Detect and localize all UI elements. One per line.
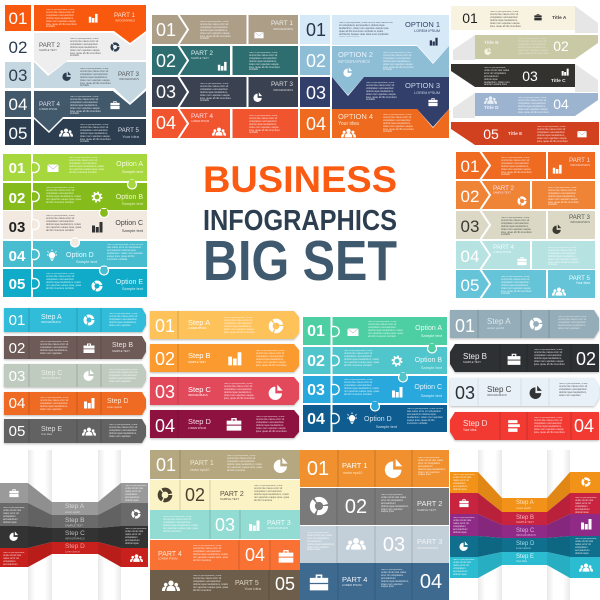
ribbon band: step C: Step C (65, 530, 85, 537)
ribbon band: step C (450, 514, 600, 538)
row: option E: 05 (9, 276, 25, 293)
row: step B: SAMPLE TEXT (188, 360, 206, 364)
row: title A (451, 6, 598, 33)
row: part 3: PART 3 (267, 520, 291, 527)
row: part 1: 01 (156, 455, 176, 475)
row: part 2: PART 2 (39, 42, 61, 49)
ribbon band: step C (0, 526, 148, 548)
row: option 1: OPTION 1 (405, 20, 440, 29)
row: step E: 05 (9, 423, 25, 440)
row: option B: Sample text (421, 365, 443, 370)
row: step B: Step B (112, 342, 133, 349)
row: part 3 (150, 510, 300, 539)
row: part 5 (150, 570, 300, 600)
row: step C (450, 378, 599, 406)
row: step D: 04 (155, 416, 175, 436)
ribbon band: step A (0, 483, 148, 515)
row: part 4: LOREM IPSUM (493, 250, 511, 254)
ribbon band: step A: vector eps10 (516, 506, 531, 510)
row: part 1: PART 1 (190, 460, 214, 467)
row: option 2: 02 (306, 51, 326, 71)
row: step A: Step A (487, 317, 511, 326)
row: part 2: SAMPLE TEXT (191, 56, 209, 60)
row: step C: 03 (9, 368, 25, 385)
ribbon band: step E: Your idea (516, 559, 527, 563)
panel: five parts tile grid, tan cream teal orange brown (150, 450, 300, 600)
row: part 3 (300, 526, 449, 563)
row: step C: INFOGRAPHICS (188, 393, 208, 397)
row: option D: Sample text (76, 259, 98, 264)
title: BIG SET (203, 229, 397, 293)
row: option D: 04 (307, 411, 325, 428)
row: step C: INFOGRAPHICS (487, 393, 507, 397)
ribbon band: step A: Step A (516, 500, 534, 506)
row: part 2 (152, 45, 298, 76)
row: part 4: PART 4 (39, 101, 61, 108)
row: option C: Option C (115, 220, 143, 227)
row: title D (453, 93, 598, 118)
row: part 3: 03 (9, 66, 27, 85)
row: part 4: LOREM IPSUM (342, 583, 362, 587)
row: option 1: LOREM IPSUM (414, 29, 440, 33)
panel: steps with alternating arrows, slate black pale red (450, 310, 599, 440)
row: part 4: 04 (245, 545, 265, 565)
row: part 2: SAMPLE TEXT (39, 48, 57, 52)
row: part 5: 05 (9, 124, 27, 143)
row: part 2 (150, 480, 300, 510)
row: title C: 03 (522, 68, 538, 84)
row: part 3: INFOGRAPHICS (570, 220, 590, 224)
row: part 2 (300, 488, 449, 525)
row: part 4 (300, 563, 449, 600)
row: step D (450, 412, 599, 440)
row: part 2: 02 (185, 485, 205, 505)
row: part 2: PART 2 (220, 491, 244, 498)
panel: five parts with zigzag orange to navy bands (5, 5, 146, 145)
row: option C (3, 208, 147, 239)
row: part 3: PART 3 (118, 71, 140, 78)
row: option D (3, 238, 147, 267)
row: option E: Option E (116, 279, 143, 286)
row: title C (451, 64, 598, 92)
row: part 2: PART 2 (493, 185, 515, 192)
row: part 1: vector eps10 (343, 471, 363, 475)
ribbon band: step A: Step A (65, 503, 85, 510)
row: option 3: 03 (306, 83, 326, 103)
row: part 1: INFOGRAPHICS (115, 18, 135, 22)
row: part 5 (456, 269, 595, 299)
row: option A: 01 (307, 323, 325, 340)
row: part 3 (456, 210, 595, 240)
ribbon band: step C: Step C (516, 528, 535, 534)
ribbon band: step D: Lorem ipsum (516, 546, 531, 550)
row: step C: INFOGRAPHICS (41, 376, 61, 380)
row: part 4: 04 (461, 247, 479, 266)
row: step B: 02 (155, 349, 175, 369)
ribbon band: step D (0, 542, 148, 567)
row: step D: Your idea (463, 428, 477, 432)
panel: folded rainbow ribbon on white pleats (450, 450, 600, 600)
panel: folded ribbons with titles A to E (451, 6, 599, 145)
row: title D: Title D (484, 105, 499, 111)
row: part 4: LOREM IPSUM (158, 556, 178, 560)
row: title A: 01 (462, 10, 478, 26)
row: title B: Title B (484, 40, 499, 46)
panel: five steps, cyan brown grey orange (4, 308, 146, 443)
row: step A: Step A (188, 318, 210, 327)
ribbon band: step E: Step E (516, 554, 534, 560)
row: part 2: SAMPLE TEXT (417, 508, 437, 512)
row: part 3: 03 (461, 217, 479, 236)
row: part 2: 02 (156, 51, 176, 71)
row: option C: Sample text (421, 393, 443, 398)
row: step B: SAMPLE TEXT (463, 360, 481, 364)
row: step D (150, 410, 299, 438)
row: title E: 05 (483, 126, 499, 142)
row: step B: SAMPLE TEXT (112, 349, 130, 353)
row: part 5: 05 (275, 574, 295, 594)
row: option A: 01 (9, 160, 25, 177)
row: title D: 04 (553, 96, 569, 112)
ribbon band: step D: Step D (516, 541, 535, 547)
row: part 1: PART 1 (114, 12, 136, 19)
row: step A: Step A (41, 314, 62, 321)
row: step C: Step C (41, 370, 62, 377)
row: part 3 (152, 76, 298, 108)
row: part 1 (300, 450, 449, 487)
row: part 2: SAMPLE TEXT (493, 190, 511, 194)
row: part 4: PART 4 (158, 551, 182, 558)
ribbon band: step D: Step D (65, 543, 85, 550)
row: part 1 (456, 151, 595, 180)
ribbon band: step B: Step B (65, 517, 85, 524)
row: title E (451, 122, 599, 145)
row: part 3: 03 (156, 82, 176, 102)
ribbon band: step B: SAMPLE TEXT (65, 524, 83, 528)
row: part 2 (5, 33, 146, 74)
panel: five parts with chevrons, orange to cyan (456, 151, 595, 299)
row: option A (303, 317, 447, 345)
row: part 5: PART 5 (118, 127, 140, 134)
row: step B (450, 344, 599, 372)
row: part 4: PART 4 (493, 244, 515, 251)
row: title B (453, 35, 598, 60)
row: step D: Step D (107, 398, 128, 405)
row: step A: 01 (455, 316, 475, 336)
row: option 1: 01 (306, 20, 326, 40)
panel: four parts with chevrons, tan teal navy red (152, 14, 298, 139)
row: part 3: INFOGRAPHICS (417, 546, 438, 550)
row: option C (303, 373, 447, 403)
row: step C (150, 377, 299, 405)
title: INFOGRAPHICS (203, 205, 397, 237)
row: step D: Step D (188, 417, 212, 426)
row: part 4: PART 4 (342, 575, 367, 584)
row: option 2: INFOGRAPHICS (338, 59, 370, 64)
row: option 4 (300, 109, 449, 138)
ribbon band: step D: Lorem ipsum (65, 550, 80, 554)
row: option A: Sample text (421, 333, 443, 338)
row: part 1: PART 1 (569, 157, 591, 164)
row: part 1: INFOGRAPHICS (273, 27, 293, 31)
row: part 2: 02 (9, 38, 27, 57)
row: option D: Option D (364, 416, 392, 423)
panel: green puzzle options A to E (3, 154, 147, 297)
row: step E: Step E (41, 426, 62, 433)
row: part 1: 01 (156, 20, 176, 40)
row: option B: 02 (307, 353, 325, 370)
row: part 3: 03 (215, 515, 235, 535)
ribbon band: step E (450, 552, 600, 578)
row: step C: Step C (487, 385, 512, 394)
row: step A (4, 308, 146, 332)
row: part 4: PART 4 (191, 113, 213, 120)
row: option E (3, 266, 147, 297)
row: step B: Step B (188, 351, 211, 360)
row: option 4: OPTION 4 (338, 112, 373, 121)
row: part 3: 03 (383, 534, 405, 556)
row: step B: 02 (9, 340, 25, 357)
row: part 5: Your idea (244, 586, 262, 591)
row: part 4 (150, 540, 300, 570)
row: step B: 02 (576, 349, 596, 369)
row: part 5: PART 5 (235, 580, 259, 587)
row: title C: Title C (551, 78, 566, 84)
row: step A: 01 (9, 312, 25, 329)
row: part 1 (5, 5, 146, 43)
row: part 1: PART 1 (271, 20, 293, 27)
row: option 3: LOREM IPSUM (414, 91, 440, 95)
row: part 2: 02 (345, 496, 367, 518)
row: part 1: INFOGRAPHICS (570, 163, 590, 167)
row: part 1 (150, 450, 300, 479)
row: part 3 (5, 62, 146, 103)
row: title A: Title A (552, 15, 567, 21)
row: option 2: OPTION 2 (338, 50, 373, 59)
panel: four options with arrows, light blue to orange (300, 15, 449, 138)
row: option B (3, 180, 147, 210)
row: step D: 04 (9, 395, 25, 412)
row: option 3 (300, 77, 449, 127)
row: option D: Option D (66, 252, 94, 259)
row: step A (450, 310, 599, 338)
row: option D: Sample text (376, 424, 398, 429)
row: option 4: Your idea (338, 121, 359, 127)
ribbon band: step B: SAMPLE TEXT (516, 520, 534, 524)
row: option 3: OPTION 3 (405, 81, 440, 90)
row: part 3: PART 3 (271, 81, 293, 88)
row: part 1: PART 1 (342, 461, 367, 470)
row: part 5: 05 (461, 276, 479, 295)
row: part 2: 02 (461, 187, 479, 206)
row: part 1: vector eps10 (190, 468, 210, 472)
panel: folded grey and red ribbon on white pleats (0, 450, 148, 600)
ribbon band: step B: Step B (516, 515, 534, 521)
row: part 4: LOREM IPSUM (39, 107, 57, 111)
row: part 2: SAMPLE TEXT (220, 497, 240, 501)
row: step D: LOREM IPSUM (188, 426, 206, 430)
row: part 4 (152, 108, 298, 139)
title: BUSINESS (203, 159, 397, 200)
row: step C: 03 (455, 383, 475, 403)
row: option B: 02 (9, 190, 25, 207)
ribbon band: step D (450, 536, 600, 557)
row: option C: Sample text (122, 228, 144, 233)
row: option A: Sample text (122, 169, 144, 174)
row: option 1 (300, 15, 449, 63)
row: step D (4, 392, 146, 415)
row: option C: Option C (414, 384, 442, 391)
row: part 3: INFOGRAPHICS (119, 77, 139, 81)
row: part 2 (456, 180, 595, 210)
panel: four steps, yellow orange red maroon (150, 311, 299, 438)
row: step A: vector eps10 (487, 326, 505, 330)
ribbon band: step A (450, 472, 600, 512)
ribbon band: step B (0, 503, 148, 528)
row: part 4: 04 (156, 113, 176, 133)
row: title B: 02 (553, 38, 569, 54)
row: part 4: LOREM IPSUM (191, 119, 209, 123)
row: step E: Your idea (41, 432, 52, 436)
row: part 3: INFOGRAPHICS (267, 526, 288, 530)
row: step A: 01 (155, 316, 175, 336)
row: part 1: 01 (307, 458, 329, 480)
row: step D: 04 (574, 416, 594, 436)
row: option 4: 04 (306, 114, 326, 134)
panel: four parts tile grid, orange grey pale blue (300, 450, 449, 600)
row: part 1 (152, 14, 298, 45)
ribbon band: step A: vector eps10 (65, 510, 80, 514)
row: option E: Sample text (122, 286, 144, 291)
row: option B (303, 344, 447, 374)
row: step C: 03 (155, 382, 175, 402)
row: option C: 03 (9, 219, 25, 236)
row: part 4: 04 (9, 95, 27, 114)
row: option A (3, 154, 147, 181)
row: step D: Step D (463, 419, 488, 428)
row: part 5: Your idea (122, 134, 140, 139)
row: step A: INFOGRAPHICS (41, 320, 61, 324)
row: part 4 (456, 240, 595, 270)
row: title E: Title E (508, 131, 523, 137)
row: part 2: PART 2 (191, 50, 213, 57)
row: part 4: 04 (420, 571, 442, 593)
row: option B: Option B (415, 357, 442, 364)
panel: teal and blue puzzle options A to D (303, 317, 447, 432)
row: part 5: PART 5 (569, 275, 591, 282)
row: step B: Step B (463, 352, 487, 361)
ribbon band: step C: INFOGRAPHICS (516, 533, 536, 537)
row: part 4 (5, 91, 146, 131)
row: part 5 (5, 119, 146, 145)
row: step D: Lorem ipsum (107, 405, 122, 409)
row: step B (4, 336, 146, 359)
row: part 2: PART 2 (417, 499, 442, 508)
row: part 3: PART 3 (417, 537, 442, 546)
row: part 1: 01 (9, 9, 27, 28)
title (203, 159, 397, 293)
ribbon band: step C: INFOGRAPHICS (65, 536, 85, 540)
row: step B (150, 344, 299, 372)
row: option D: 04 (9, 248, 26, 265)
row: step A (150, 311, 299, 339)
row: option B: Option B (116, 194, 143, 201)
row: step C (4, 364, 146, 387)
row: part 5: Your idea (576, 281, 590, 285)
row: step A: LOREM IPSUM (188, 326, 206, 330)
row: part 3: INFOGRAPHICS (273, 88, 293, 92)
row: option B: Sample text (122, 201, 144, 206)
row: part 3: PART 3 (569, 214, 591, 221)
row: step C: Step C (188, 385, 212, 394)
row: step E (4, 419, 146, 443)
row: option 2 (300, 46, 449, 95)
row: option D (303, 402, 447, 432)
ribbon band: step B (450, 493, 600, 525)
row: part 1: 01 (461, 157, 479, 176)
row: option A: Option A (415, 325, 442, 332)
row: option A: Option A (116, 161, 143, 168)
row: option C: 03 (307, 382, 325, 399)
